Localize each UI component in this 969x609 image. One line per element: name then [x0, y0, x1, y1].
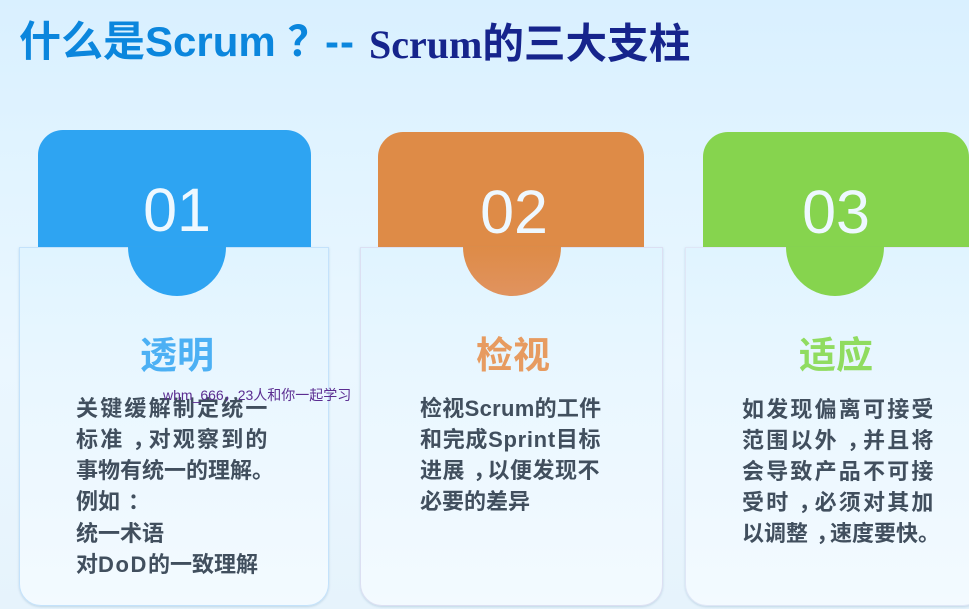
text block: transparency: 标准 ，对观察到的: [76, 427, 270, 452]
card body 2: [360, 247, 663, 606]
card body 1: [19, 247, 329, 606]
number 02: 02: [480, 178, 548, 246]
text block: adaptation: 受时 ，必须对其加: [742, 490, 936, 515]
tab notch 2: [463, 247, 561, 296]
text block: transparency: 例如 ：: [76, 489, 150, 514]
heading: adaptation: 适应: [799, 335, 873, 376]
text block: inspection: 必要的差异: [420, 489, 530, 514]
tab notch 1: [128, 247, 226, 296]
title: [19, 18, 690, 67]
text block: adaptation: [742, 397, 940, 546]
watermark: whm_666，23人和你一起学习: [163, 387, 351, 403]
text block: adaptation: 会导致产品不可接: [742, 459, 936, 484]
text block: inspection: [420, 396, 601, 514]
title part: three pillars: Scrum的三大支柱: [369, 20, 690, 67]
title part: dashes: --: [325, 18, 355, 65]
text block: transparency: 事物有统一的理解。: [76, 458, 274, 483]
tab notch 3: [786, 247, 884, 296]
text block: adaptation: 如发现偏离可接受: [742, 397, 936, 422]
text block: inspection: 检视Scrum的工件: [420, 396, 601, 421]
tab 02: [378, 132, 644, 247]
number 03: 03: [802, 178, 870, 246]
tab 01: [38, 130, 311, 247]
text block: inspection: 进展 ，以便发现不: [420, 458, 600, 483]
text block: transparency: 统一术语: [76, 521, 164, 546]
text block: transparency: 对DoD的一致理解: [76, 552, 258, 577]
text block: adaptation: 以调整 ，速度要快。: [742, 521, 940, 546]
text block: inspection: 和完成Sprint目标: [420, 427, 601, 452]
title part: what is Scrum: 什么是Scrum ？: [19, 18, 329, 65]
card body 3: [685, 247, 969, 606]
heading: transparency: 透明: [140, 335, 214, 376]
number 01: 01: [143, 176, 211, 244]
text block: adaptation: 范围以外 ，并且将: [742, 428, 936, 453]
text block: transparency: [76, 396, 274, 577]
tab 03: [703, 132, 969, 247]
heading: inspection: 检视: [476, 335, 550, 376]
text block: transparency: 关键缓解制定统一: [76, 396, 270, 421]
